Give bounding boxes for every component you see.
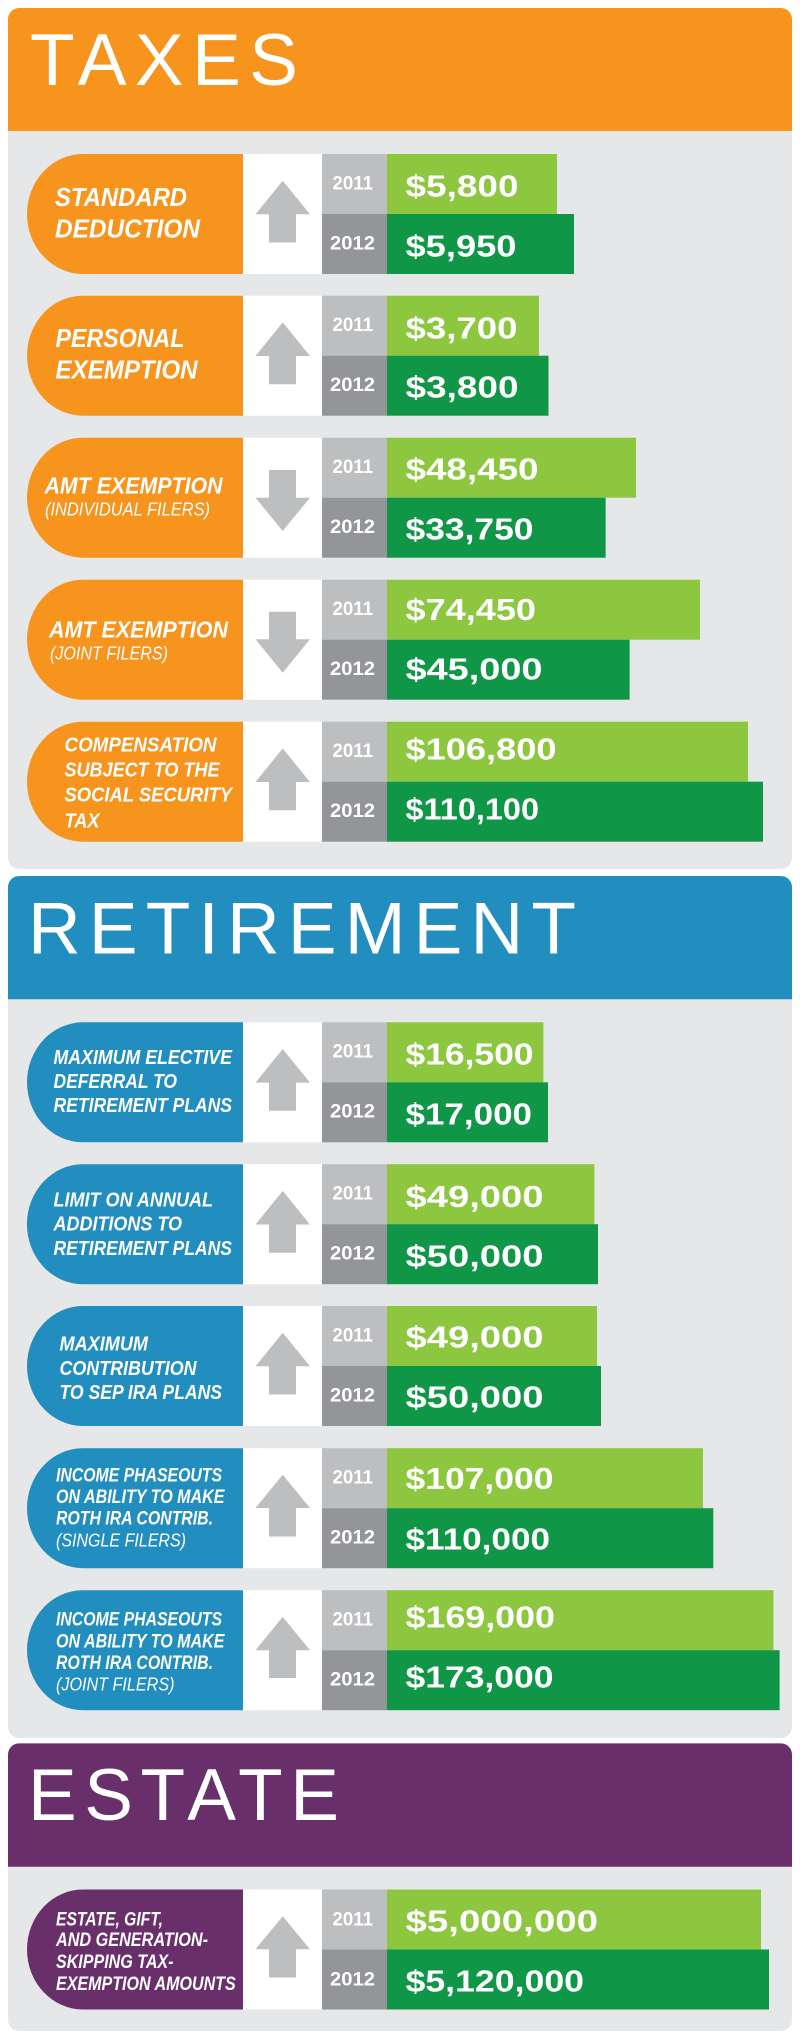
row: Roth IRA phaseouts joint: $173,000: [406, 1660, 554, 1695]
header: taxes: [8, 8, 792, 131]
row: Roth IRA phaseouts joint: 2011: [332, 1609, 373, 1631]
row: AMT exemption joint: AMT EXEMPTION: [48, 616, 228, 642]
row: maximum elective deferral: MAXIMUM ELECTIVE: [54, 1047, 233, 1069]
row: Roth IRA phaseouts joint: ON ABILITY TO MAKE: [56, 1630, 225, 1652]
row: compensation subject to social security tax: TAX: [64, 809, 101, 832]
row: AMT exemption joint: 2011: [332, 598, 373, 620]
row: maximum elective deferral: $16,500: [406, 1036, 534, 1071]
row: standard deduction: 2011: [332, 172, 373, 194]
row: compensation subject to social security tax: [27, 722, 763, 842]
header: retirement: RETIREMENT: [28, 888, 576, 969]
row: compensation subject to social security tax: $110,100: [406, 791, 539, 826]
row: Roth IRA phaseouts single: [27, 1448, 713, 1568]
row: estate, gift and generation-skipping tax: EXEMPTION AMOUNTS: [56, 1973, 236, 1995]
row: compensation subject to social security tax: 2012: [330, 800, 375, 822]
row: standard deduction: $5,800: [406, 169, 518, 204]
row: standard deduction: STANDARD: [55, 182, 187, 212]
row: estate, gift and generation-skipping tax: ESTATE, GIFT,: [56, 1908, 163, 1930]
row: estate, gift and generation-skipping tax: 2012: [330, 1968, 375, 1990]
row: standard deduction: DEDUCTION: [55, 214, 201, 244]
row: personal exemption: 2012: [330, 374, 375, 396]
row: compensation subject to social security tax: SOCIAL SECURITY: [64, 784, 234, 807]
row: maximum contribution to SEP IRA: $49,000: [406, 1319, 544, 1354]
row: Roth IRA phaseouts joint: (JOINT FILERS): [56, 1674, 174, 1694]
row: AMT exemption joint: $45,000: [406, 651, 542, 686]
row: maximum contribution to SEP IRA: CONTRIBUTION: [60, 1358, 197, 1380]
row: estate, gift and generation-skipping tax: 2011: [332, 1908, 373, 1930]
row: limit on annual additions: $49,000: [406, 1179, 544, 1214]
row: AMT exemption joint: [27, 580, 700, 700]
row: AMT exemption individual: [27, 438, 636, 558]
row: limit on annual additions: 2011: [332, 1182, 373, 1204]
row: Roth IRA phaseouts single: $110,000: [406, 1522, 550, 1557]
header: estate: [8, 1743, 792, 1867]
row: maximum contribution to SEP IRA: TO SEP IRA PLANS: [60, 1382, 223, 1404]
header: retirement: [8, 876, 792, 999]
row: personal exemption: $3,800: [406, 369, 518, 404]
row: compensation subject to social security tax: $106,800: [406, 731, 556, 766]
row: personal exemption: 2011: [332, 314, 373, 336]
row: AMT exemption individual: $33,750: [406, 511, 534, 546]
header: estate: ESTATE: [28, 1755, 339, 1836]
row: maximum contribution to SEP IRA: $50,000: [406, 1379, 544, 1414]
row: personal exemption: PERSONAL: [56, 323, 184, 353]
row: Roth IRA phaseouts single: $107,000: [406, 1461, 554, 1496]
row: Roth IRA phaseouts joint: $169,000: [406, 1600, 555, 1635]
row: standard deduction: 2012: [330, 232, 375, 254]
row: AMT exemption joint: 2012: [330, 658, 375, 680]
row: Roth IRA phaseouts joint: [27, 1590, 780, 1710]
row: personal exemption: EXEMPTION: [56, 355, 199, 385]
row: compensation subject to social security tax: COMPENSATION: [64, 734, 218, 757]
panel: taxes: [8, 8, 792, 869]
row: maximum contribution to SEP IRA: 2011: [332, 1324, 373, 1346]
row: compensation subject to social security tax: SUBJECT TO THE: [64, 759, 221, 782]
panel: estate: [8, 1743, 792, 2031]
row: maximum contribution to SEP IRA: [27, 1306, 601, 1426]
row: maximum elective deferral: RETIREMENT PLANS: [54, 1095, 233, 1117]
row: personal exemption: [27, 296, 549, 416]
row: estate, gift and generation-skipping tax: $5,000,000: [406, 1903, 598, 1938]
row: Roth IRA phaseouts single: 2011: [332, 1466, 373, 1488]
row: maximum elective deferral: DEFERRAL TO: [54, 1071, 177, 1093]
row: AMT exemption joint: (JOINT FILERS): [50, 644, 168, 664]
panel: retirement: [8, 876, 792, 1738]
row: Roth IRA phaseouts single: INCOME PHASEOUTS: [56, 1464, 222, 1486]
row: maximum elective deferral: $17,000: [406, 1096, 532, 1131]
row: compensation subject to social security tax: 2011: [332, 740, 373, 762]
row: estate, gift and generation-skipping tax: AND GENERATION-: [55, 1929, 208, 1951]
row: Roth IRA phaseouts joint: 2012: [330, 1668, 375, 1690]
row: maximum contribution to SEP IRA: MAXIMUM: [60, 1334, 149, 1356]
row: standard deduction: $5,950: [406, 229, 516, 264]
row: personal exemption: $3,700: [406, 310, 518, 345]
row: standard deduction: [27, 154, 574, 274]
row: Roth IRA phaseouts single: (SINGLE FILERS): [56, 1530, 186, 1550]
row: Roth IRA phaseouts single: ON ABILITY TO MAKE: [56, 1486, 225, 1508]
row: estate, gift and generation-skipping tax: SKIPPING TAX-: [56, 1951, 174, 1973]
header: taxes: TAXES: [30, 20, 298, 101]
row: AMT exemption individual: $48,450: [406, 451, 538, 486]
row: maximum elective deferral: [27, 1022, 548, 1142]
row: AMT exemption individual: 2011: [332, 456, 373, 478]
row: maximum elective deferral: 2012: [330, 1101, 375, 1123]
row: Roth IRA phaseouts single: 2012: [330, 1526, 375, 1548]
row: Roth IRA phaseouts single: ROTH IRA CONTRIB.: [56, 1507, 213, 1529]
row: Roth IRA phaseouts joint: INCOME PHASEOUTS: [56, 1609, 222, 1631]
row: AMT exemption individual: (INDIVIDUAL FILERS): [45, 500, 210, 520]
row: estate, gift and generation-skipping tax: [27, 1890, 769, 2010]
row: limit on annual additions: [27, 1164, 598, 1284]
row: maximum contribution to SEP IRA: 2012: [330, 1384, 375, 1406]
row: Roth IRA phaseouts joint: ROTH IRA CONTRIB.: [56, 1652, 213, 1674]
row: limit on annual additions: LIMIT ON ANNUAL: [54, 1190, 213, 1212]
row: limit on annual additions: $50,000: [406, 1239, 544, 1274]
row: limit on annual additions: 2012: [330, 1242, 375, 1264]
row: limit on annual additions: ADDITIONS TO: [53, 1214, 182, 1236]
row: maximum elective deferral: 2011: [332, 1041, 373, 1063]
row: AMT exemption individual: 2012: [330, 516, 375, 538]
row: AMT exemption joint: $74,450: [406, 592, 536, 627]
row: estate, gift and generation-skipping tax: $5,120,000: [406, 1963, 584, 1998]
row: limit on annual additions: RETIREMENT PLANS: [54, 1238, 233, 1260]
row: AMT exemption individual: AMT EXEMPTION: [44, 472, 223, 498]
